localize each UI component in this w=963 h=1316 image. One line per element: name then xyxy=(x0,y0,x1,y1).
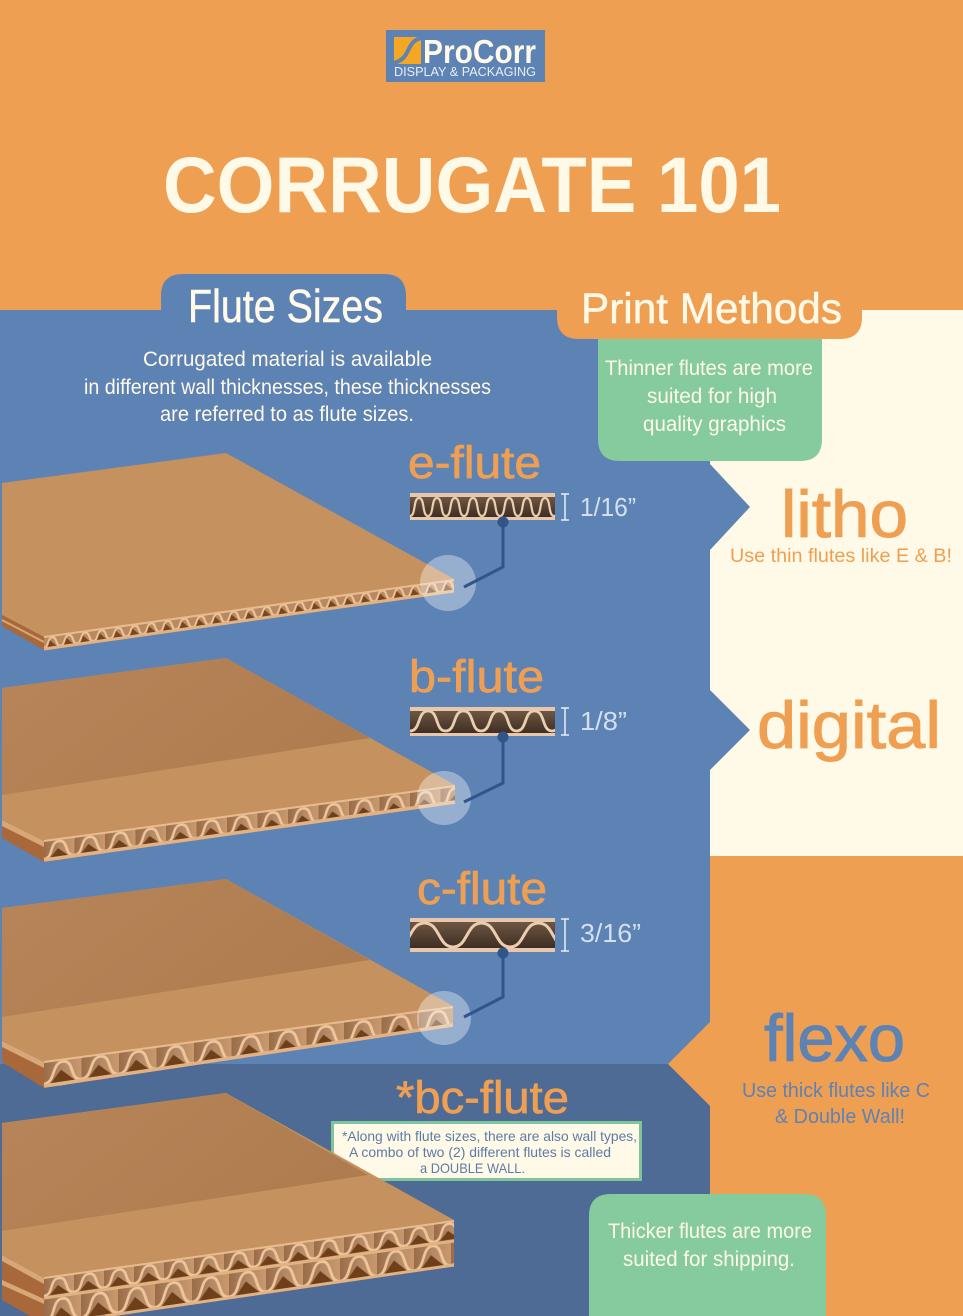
cross section: e-flute xyxy=(410,493,555,520)
highlight and leader: c-flute xyxy=(417,948,508,1045)
heading: b-flute: b-flute xyxy=(409,651,544,702)
panel: cream print methods background xyxy=(710,310,963,856)
note: double wall: a DOUBLE WALL. xyxy=(420,1160,525,1176)
callout: thinner flutes: quality graphics xyxy=(643,413,786,436)
sheet: e-flute board xyxy=(2,453,454,650)
text block: flute sizes intro: are referred to as flute sizes. xyxy=(160,403,414,426)
callout: thinner flutes xyxy=(598,339,822,461)
callout: thinner flutes: suited for high xyxy=(647,385,777,408)
text block: flute sizes intro: Corrugated material is available xyxy=(143,348,432,371)
panel: darker double wall background xyxy=(0,1064,710,1316)
print method: flexo xyxy=(742,1001,930,1128)
note: double wall xyxy=(332,1122,640,1180)
cross section: c-flute xyxy=(410,918,555,952)
sheet: b-flute board xyxy=(2,658,455,862)
print method: litho: Use thin flutes like E & B! xyxy=(730,546,952,567)
print method: flexo: flexo xyxy=(764,1001,905,1075)
print method: litho: litho xyxy=(781,477,908,551)
heading: bc-flute: *bc-flute xyxy=(396,1072,569,1123)
heading: e-flute: e-flute xyxy=(408,437,541,488)
sheet: c-flute board xyxy=(2,879,453,1088)
measure: 1/8 inch xyxy=(561,706,627,736)
note: double wall: A combo of two (2) different flutes is called xyxy=(349,1144,611,1160)
highlight and leader: b-flute xyxy=(417,732,508,825)
logo: DISPLAY & PACKAGING xyxy=(394,64,536,79)
note: double wall: *Along with flute sizes, there are also wall types, xyxy=(342,1128,637,1144)
print method: flexo: Use thick flutes like C xyxy=(742,1080,930,1102)
logo xyxy=(386,30,545,82)
arrow: litho chevron xyxy=(710,464,750,550)
arrow: digital chevron xyxy=(710,690,750,770)
logo: ProCorr xyxy=(423,33,536,70)
measure: 3/16 inch xyxy=(561,918,641,951)
print method: litho xyxy=(730,477,952,567)
text block: flute sizes intro xyxy=(84,348,491,426)
measure: 3/16 inch: 3/16” xyxy=(580,918,641,948)
highlight and leader: e-flute xyxy=(420,516,508,611)
callout: thicker flutes: Thicker flutes are more xyxy=(608,1220,812,1243)
heading: c-flute: c-flute xyxy=(417,863,547,914)
callout: thicker flutes: suited for shipping. xyxy=(623,1248,795,1271)
sheet: bc-flute board xyxy=(2,1093,454,1316)
heading tab: Flute Sizes: Flute Sizes xyxy=(188,280,383,332)
print method: digital: digital xyxy=(757,688,941,762)
measure: 1/16 inch: 1/16” xyxy=(580,492,636,522)
title: CORRUGATE 101 xyxy=(163,140,781,229)
print method: flexo: & Double Wall! xyxy=(775,1106,905,1128)
callout: thinner flutes: Thinner flutes are more xyxy=(605,357,813,380)
measure: 1/8 inch: 1/8” xyxy=(580,706,627,736)
arrow: flexo chevron xyxy=(668,1022,710,1106)
text block: flute sizes intro: in different wall thicknesses, these thicknesses xyxy=(84,376,491,399)
heading tab: Print Methods: Print Methods xyxy=(581,285,842,333)
cross section: b-flute xyxy=(410,707,555,736)
callout: thicker flutes xyxy=(589,1194,826,1316)
panel: blue flute sizes background xyxy=(0,310,710,1065)
